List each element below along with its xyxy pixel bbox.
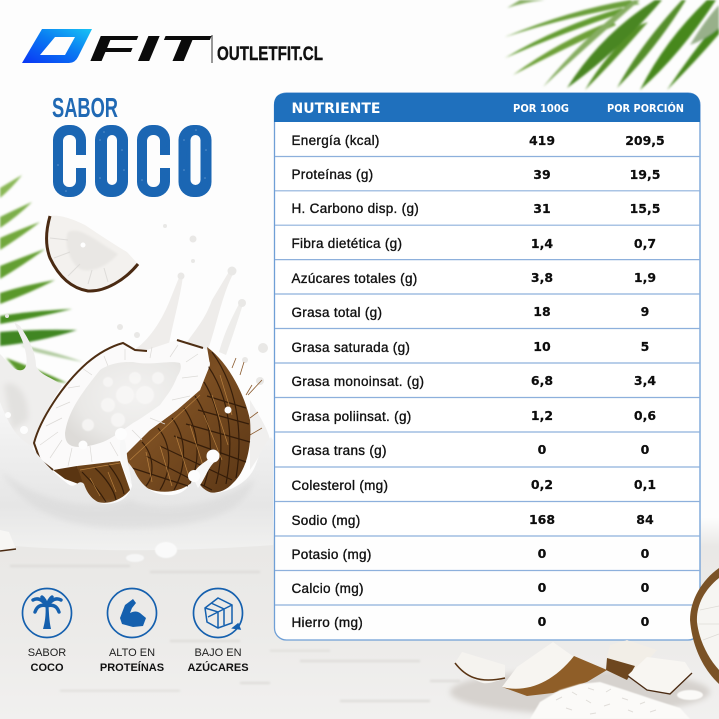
table rows: 0	[538, 442, 547, 457]
label: bajo en azucares: AZÚCARES	[187, 661, 249, 674]
coconut flesh	[34, 340, 210, 470]
icon: palm tree	[22, 588, 72, 638]
table header: POR 100G	[513, 102, 569, 115]
logo FIT wordmark: FIT	[89, 28, 213, 69]
table rows: 18	[533, 304, 551, 319]
coconut piece 4	[628, 657, 692, 693]
table rows: 31	[533, 201, 551, 216]
label: sabor coco: COCO	[30, 662, 64, 674]
coconut piece 3	[607, 640, 657, 680]
table rows: Colesterol (mg)	[292, 478, 388, 493]
logo O mark	[22, 29, 92, 63]
title: sabor coco	[52, 92, 212, 214]
table rows: 1,4	[531, 236, 553, 251]
label: sabor coco: SABOR	[28, 647, 66, 659]
table rows: 5	[641, 339, 649, 354]
right coconut half	[690, 568, 719, 684]
logo	[22, 28, 323, 69]
coconut piece 1	[455, 652, 505, 683]
flesh fibres	[40, 345, 198, 466]
table rows: Azúcares totales (g)	[292, 271, 418, 286]
icon: flexed arm	[108, 588, 156, 638]
table rows: 209,5	[625, 133, 665, 148]
flesh rim	[34, 340, 203, 470]
table rows: 419	[529, 133, 555, 148]
title word: coco: COCO	[53, 110, 212, 214]
palm leaves top right	[505, 0, 719, 90]
falling coconut chip	[47, 216, 138, 291]
table rows: 6,8	[531, 373, 553, 388]
back milk splash	[0, 224, 270, 470]
table rows: Grasa saturada (g)	[292, 340, 410, 355]
table rows: 0	[538, 546, 547, 561]
table rows: 0,2	[531, 477, 553, 492]
icon: cube	[194, 588, 242, 638]
table rows: Grasa trans (g)	[292, 443, 387, 458]
table rows: 15,5	[630, 201, 660, 216]
table rows: 0,1	[634, 477, 656, 492]
table rows: 84	[636, 512, 654, 527]
table rows: 1,9	[634, 270, 656, 285]
label: alto en proteinas: PROTEÍNAS	[100, 661, 164, 674]
table rows: Fibra dietética (g)	[292, 236, 402, 251]
label: alto en proteinas: ALTO EN	[109, 647, 155, 659]
title word: sabor: SABOR	[52, 92, 118, 123]
table rows: Grasa total (g)	[292, 305, 382, 320]
rim piece	[53, 466, 84, 486]
front milk crown	[0, 402, 273, 562]
table rows: 0,7	[634, 236, 656, 251]
cavity	[65, 362, 181, 447]
table rows: 168	[529, 512, 555, 527]
panel: nutrition table	[274, 93, 700, 640]
table rows: Calcio (mg)	[292, 581, 364, 596]
table rows: Grasa poliinsat. (g)	[292, 409, 412, 424]
table header: POR PORCIÓN	[607, 102, 684, 115]
table rows: Grasa monoinsat. (g)	[292, 374, 424, 389]
table rows	[292, 133, 665, 630]
table rows: 3,4	[634, 373, 656, 388]
table rows: 10	[533, 339, 551, 354]
shredded coconut pile	[530, 682, 703, 719]
table rows: 0	[538, 614, 547, 629]
table rows: 0	[641, 614, 650, 629]
label: sabor coco	[28, 647, 66, 674]
table rows: 0,6	[634, 408, 656, 423]
table header	[274, 93, 700, 122]
palm leaves left	[0, 175, 83, 383]
table rows: 1,2	[531, 408, 553, 423]
table rows: 39	[533, 167, 551, 182]
husk fibres spikes	[232, 358, 262, 435]
table rows: 3,8	[531, 270, 553, 285]
table rows: 9	[641, 304, 649, 319]
label: alto en proteinas	[100, 647, 164, 674]
coconut piece 2	[502, 642, 574, 691]
table rows: Potasio (mg)	[292, 547, 372, 562]
lower husk piece	[77, 461, 130, 503]
table rows: Hierro (mg)	[292, 615, 363, 630]
label: bajo en azucares: BAJO EN	[194, 647, 242, 659]
coconut half	[34, 340, 262, 503]
icon row	[22, 588, 249, 674]
table rows: 19,5	[630, 167, 660, 182]
table rows: Energía (kcal)	[292, 133, 380, 148]
table rows: 0	[641, 442, 650, 457]
coconut pieces bottom right	[455, 568, 719, 719]
table rows: 0	[538, 580, 547, 595]
small coconut piece on left floor	[0, 530, 16, 551]
table rows: 0	[641, 546, 650, 561]
table rows: Proteínas (g)	[292, 167, 373, 182]
label: bajo en azucares	[187, 647, 249, 674]
table rows: Sodio (mg)	[292, 513, 361, 528]
table header: NUTRIENTE	[292, 101, 380, 117]
table rows: H. Carbono disp. (g)	[292, 201, 419, 216]
table rows: 0	[641, 580, 650, 595]
main husk	[120, 347, 250, 493]
logo site name: OUTLETFIT.CL	[217, 44, 323, 65]
